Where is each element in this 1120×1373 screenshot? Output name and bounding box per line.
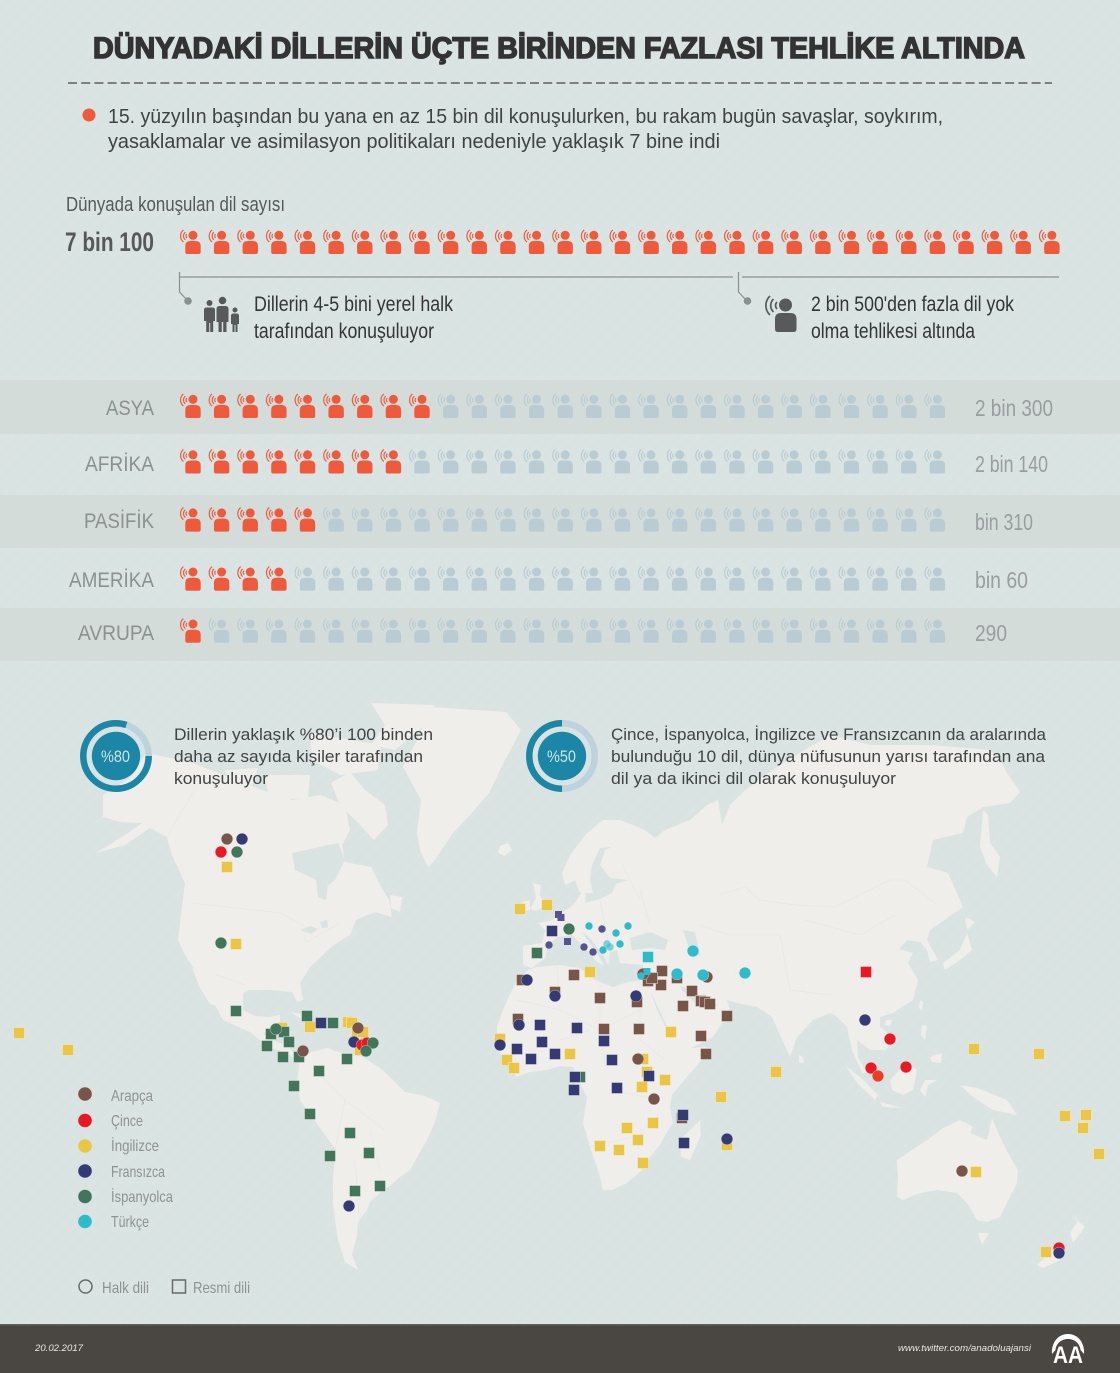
legend: marker shapes: [79, 1280, 250, 1297]
Greenland: [403, 707, 521, 867]
row: Afrika: [85, 449, 1048, 477]
text: endangered: olma tehlikesi altında: [811, 320, 975, 343]
markers: Spanish: [215, 846, 585, 1196]
text: 50 percent: bulunduğu 10 dil, dünya nüfusunun yarısı tarafından ana: [611, 747, 1046, 766]
donut: 80 percent: [83, 723, 149, 789]
markers: Turkish: [585, 922, 751, 981]
Madagascar: [680, 1120, 701, 1160]
intro text block: yasaklamalar ve asimilasyon politikaları nedeniyle yaklaşık 7 bine indi: [108, 131, 720, 153]
legend: languages: Fransızca: [111, 1164, 165, 1181]
row: Avrupa: AVRUPA: [78, 622, 154, 645]
Newfoundland: [390, 895, 402, 912]
Arctic islands: [225, 703, 435, 840]
title: DÜNYADAKİ DİLLERİN ÜÇTE BİRİNDEN FAZLASI TEHLİKE ALTINDA: [93, 32, 1025, 65]
markers: English: [14, 862, 1104, 1258]
text: 50 percent: Çince, İspanyolca, İngilizce ve Fransızcanın da aralarında: [611, 725, 1047, 744]
row: Amerika: AMERİKA: [69, 569, 154, 592]
Tasmania and New Zealand: [978, 1213, 1085, 1268]
Australia: [897, 1118, 1018, 1222]
band backgrounds: [0, 380, 1120, 661]
row: Pasifik: bin 310: [975, 509, 1033, 535]
row: Amerika: bin 60: [975, 567, 1028, 593]
Baja California: [192, 968, 216, 1006]
logo: AA: [1053, 1342, 1083, 1369]
logo: [1052, 1334, 1084, 1369]
Britain, Ireland, Iceland: [498, 843, 546, 912]
text: 80 percent: daha az sayıda kişiler tarafından: [174, 747, 423, 766]
legend: marker shapes: Halk dili: [102, 1280, 149, 1297]
bullet: [82, 108, 96, 122]
text: 80 percent: konuşuluyor: [174, 769, 268, 788]
row: Pasifik: PASİFİK: [84, 510, 154, 533]
donut: 50 percent: %50: [547, 748, 576, 766]
markers: Spanish overlay: [360, 1037, 379, 1057]
text: local speakers: tarafından konuşuluyor: [254, 320, 434, 343]
text: 80 percent: Dillerin yaklaşık %80’i 100 binden: [174, 725, 433, 744]
inland seas: [292, 843, 718, 1008]
Africa: [497, 965, 707, 1190]
row: Amerika: [69, 567, 1028, 593]
text: 80 percent: [174, 725, 433, 788]
map markers: [14, 833, 1104, 1259]
legend: languages: İngilizce: [111, 1136, 159, 1155]
row: Avrupa: [78, 619, 1007, 646]
heading: number of languages: Dünyada konuşulan dil sayısı: [66, 194, 285, 216]
row: Asya: 2 bin 300: [975, 395, 1053, 421]
footer: [0, 1324, 1120, 1373]
legend: marker shapes: Resmi dili: [193, 1280, 250, 1297]
bracket: local speakers: [180, 272, 733, 305]
legend: languages: Türkçe: [111, 1214, 149, 1231]
donut: 80 percent: %80: [101, 748, 130, 766]
legend: languages: İspanyolca: [111, 1187, 173, 1206]
bracket: endangered: [738, 272, 1059, 305]
world map: [96, 703, 1085, 1270]
date: 20.02.2017: [34, 1343, 84, 1354]
text: 50 percent: dil ya da ikinci dil olarak konuşuluyor: [611, 769, 896, 788]
Sakhalin, Japan, Taiwan, Hainan: [885, 810, 1000, 1026]
markers: French: [236, 833, 871, 1212]
legend: languages: [78, 1087, 173, 1231]
text: 50 percent: [611, 725, 1047, 788]
text: endangered: [811, 293, 1014, 343]
icon: group of people: [204, 297, 239, 332]
South America: [297, 1048, 440, 1270]
total number: 7 bin 100: [65, 227, 154, 257]
text: local speakers: Dillerin 4-5 bini yerel halk: [254, 293, 453, 316]
legend: languages: Çince: [111, 1113, 143, 1130]
source url: www.twitter.com/anadoluajansi: [898, 1343, 1032, 1354]
Southeast Asia islands: [846, 1025, 1017, 1115]
row: Asya: [106, 394, 1053, 421]
icon: speaker with signal: [766, 296, 796, 332]
row: Afrika: 2 bin 140: [975, 451, 1048, 477]
row: Avrupa: 290: [975, 620, 1007, 646]
markers: Chinese: [215, 846, 1065, 1254]
markers: Arabic: [221, 833, 968, 1177]
intro text block: [82, 106, 943, 153]
row: Asya: ASYA: [106, 397, 154, 420]
intro text block: 15. yüzyılın başından bu yana en az 15 bin dil konuşulurken, bu rakam bugün savaşlar, soykırım,: [108, 106, 943, 128]
icon row: world total: [181, 230, 1060, 254]
row: Pasifik: [84, 508, 1033, 535]
borders: [167, 787, 938, 1230]
row: Afrika: AFRİKA: [85, 453, 154, 476]
marker overlay: New Zealand French: [1053, 1247, 1065, 1259]
Cuba and Caribbean: [290, 1012, 331, 1027]
Eurasia: [523, 735, 1020, 1073]
donut: 50 percent: [529, 723, 595, 789]
text: local speakers: [254, 293, 453, 343]
Sri Lanka: [799, 1055, 804, 1063]
legend: languages: Arapça: [111, 1088, 153, 1105]
North America: [96, 753, 392, 1060]
text: endangered: 2 bin 500'den fazla dil yok: [811, 293, 1014, 316]
